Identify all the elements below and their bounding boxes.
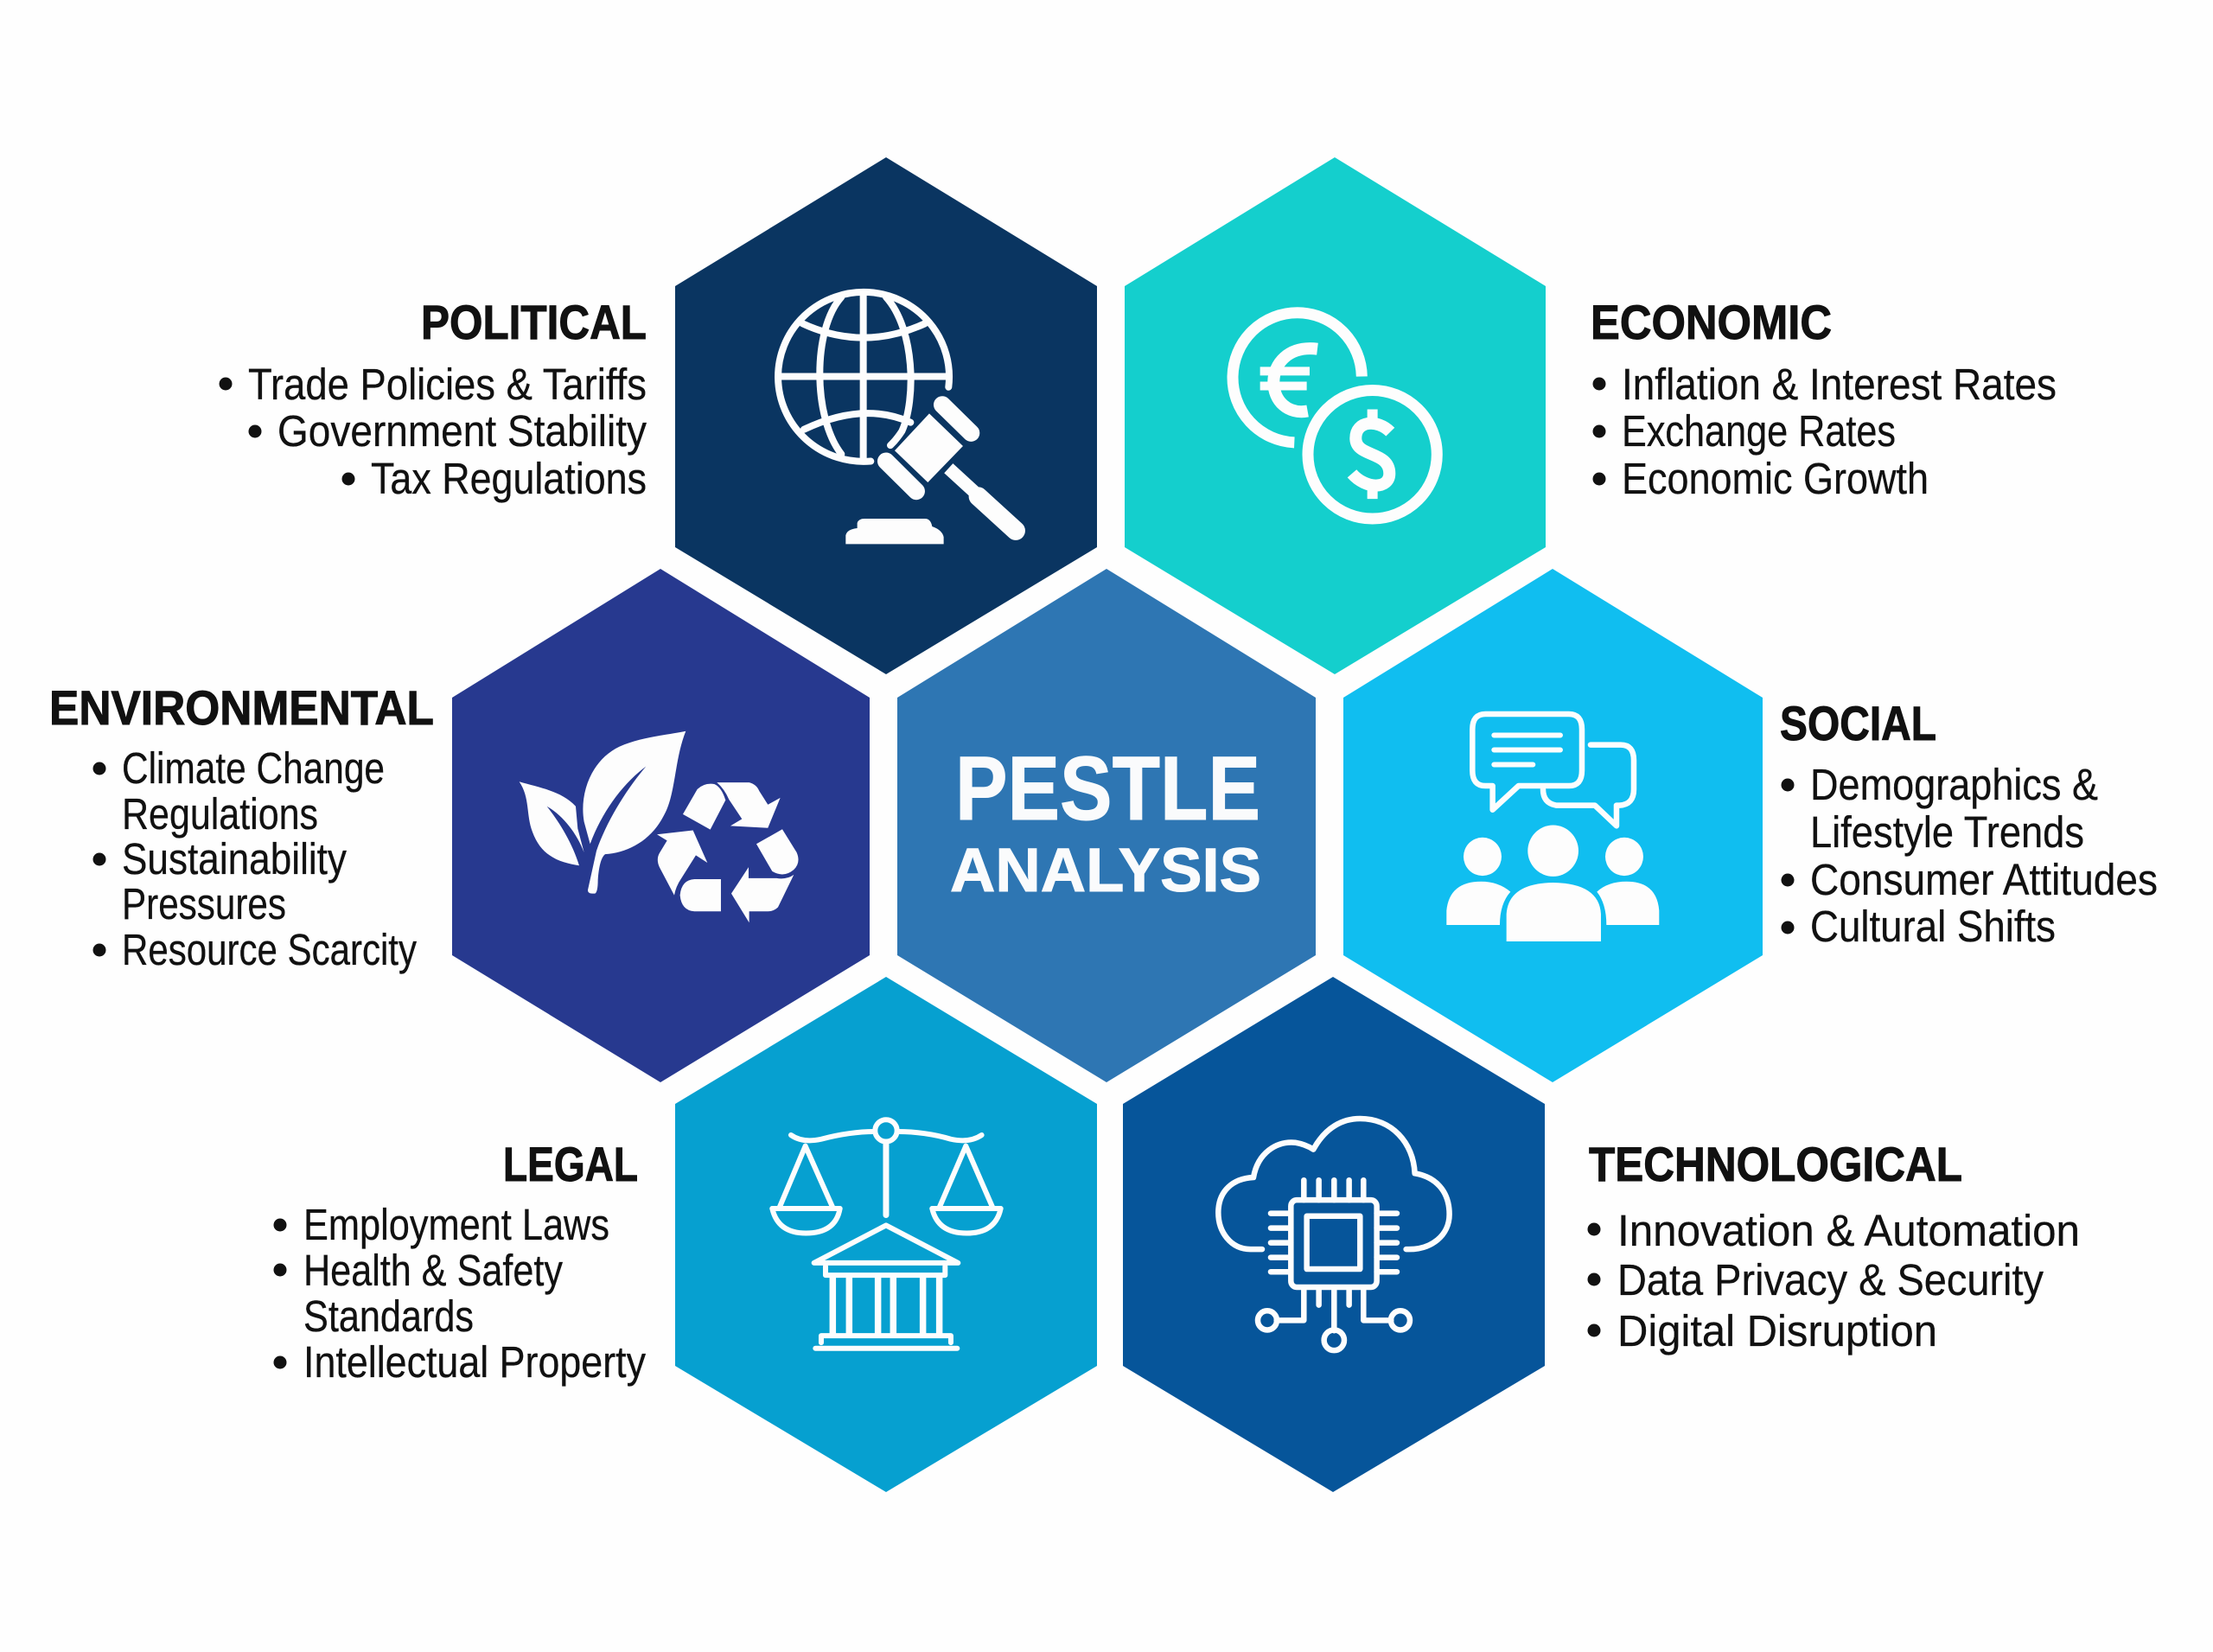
list: political factors [220, 360, 647, 503]
panel: political [220, 157, 1097, 674]
panel: environmental [49, 569, 870, 1082]
list: technological factors: Data Privacy & Security [1617, 1255, 2044, 1304]
list: social factors: Demographics & [1810, 760, 2098, 809]
heading: economic: ECONOMIC [1591, 295, 1832, 349]
panel: centre title [897, 569, 1316, 1082]
list: legal factors: Employment Laws [303, 1200, 609, 1249]
list: social factors: Cultural Shifts [1810, 902, 2056, 951]
subtitle: ANALYSIS: ANALYSIS [950, 837, 1261, 905]
list: environmental factors: Pressures [122, 879, 286, 928]
list: environmental factors: Climate Change [122, 743, 385, 793]
list: economic factors: Economic Growth [1622, 454, 1929, 503]
hexagon: centre [897, 569, 1316, 1082]
list: economic factors [1592, 360, 2057, 503]
list: environmental factors: Sustainability [122, 834, 347, 883]
list: economic factors: Exchange Rates [1622, 406, 1896, 456]
hexagon: economic [1125, 157, 1546, 674]
list: legal factors: Standards [303, 1292, 474, 1341]
panel: technological [1123, 977, 2080, 1492]
list: environmental factors: Regulations [122, 789, 318, 839]
list: social factors: Lifestyle Trends [1810, 807, 2084, 857]
icon: euro and dollar coins [1233, 313, 1437, 519]
hexagon: social [1343, 569, 1763, 1082]
list: environmental factors: Resource Scarcity [122, 925, 417, 974]
panel: legal [273, 977, 1097, 1492]
list: political factors: Tax Regulations [371, 454, 647, 503]
list: environmental factors [93, 743, 417, 974]
hexagon: technological [1123, 977, 1545, 1492]
heading: legal: LEGAL [503, 1137, 638, 1191]
heading: environmental: ENVIRONMENTAL [49, 680, 434, 735]
icon: leaves and recycling arrows [520, 731, 799, 922]
list: legal factors: Health & Safety [303, 1246, 563, 1295]
hexagon: legal [675, 977, 1097, 1492]
icon: cloud and microchip [1218, 1119, 1450, 1350]
heading: social: SOCIAL [1780, 696, 1936, 750]
list: social factors [1781, 760, 2158, 951]
panel: social [1343, 569, 2158, 1082]
panel: economic [1125, 157, 2057, 674]
list: economic factors: Inflation & Interest Rates [1622, 360, 2057, 409]
hexagon: environmental [452, 569, 870, 1082]
heading: political: POLITICAL [421, 295, 647, 349]
title: PESTLE: PESTLE [955, 738, 1260, 839]
icon: people with speech bubbles [1446, 714, 1659, 941]
list: technological factors: Innovation & Automation [1617, 1206, 2080, 1255]
hexagon: political [675, 157, 1097, 674]
list: political factors: Trade Policies & Tariffs [248, 360, 647, 409]
list: technological factors: Digital Disruption [1617, 1306, 1937, 1355]
icon: scales of justice and courthouse [772, 1119, 1001, 1349]
list: legal factors [273, 1200, 646, 1387]
list: technological factors [1587, 1206, 2080, 1355]
list: political factors: Government Stability [277, 406, 647, 456]
list: legal factors: Intellectual Property [303, 1337, 646, 1387]
icon: globe and gavel [778, 292, 1016, 544]
list: social factors: Consumer Attitudes [1810, 855, 2158, 904]
heading: technological: TECHNOLOGICAL [1589, 1137, 1962, 1191]
